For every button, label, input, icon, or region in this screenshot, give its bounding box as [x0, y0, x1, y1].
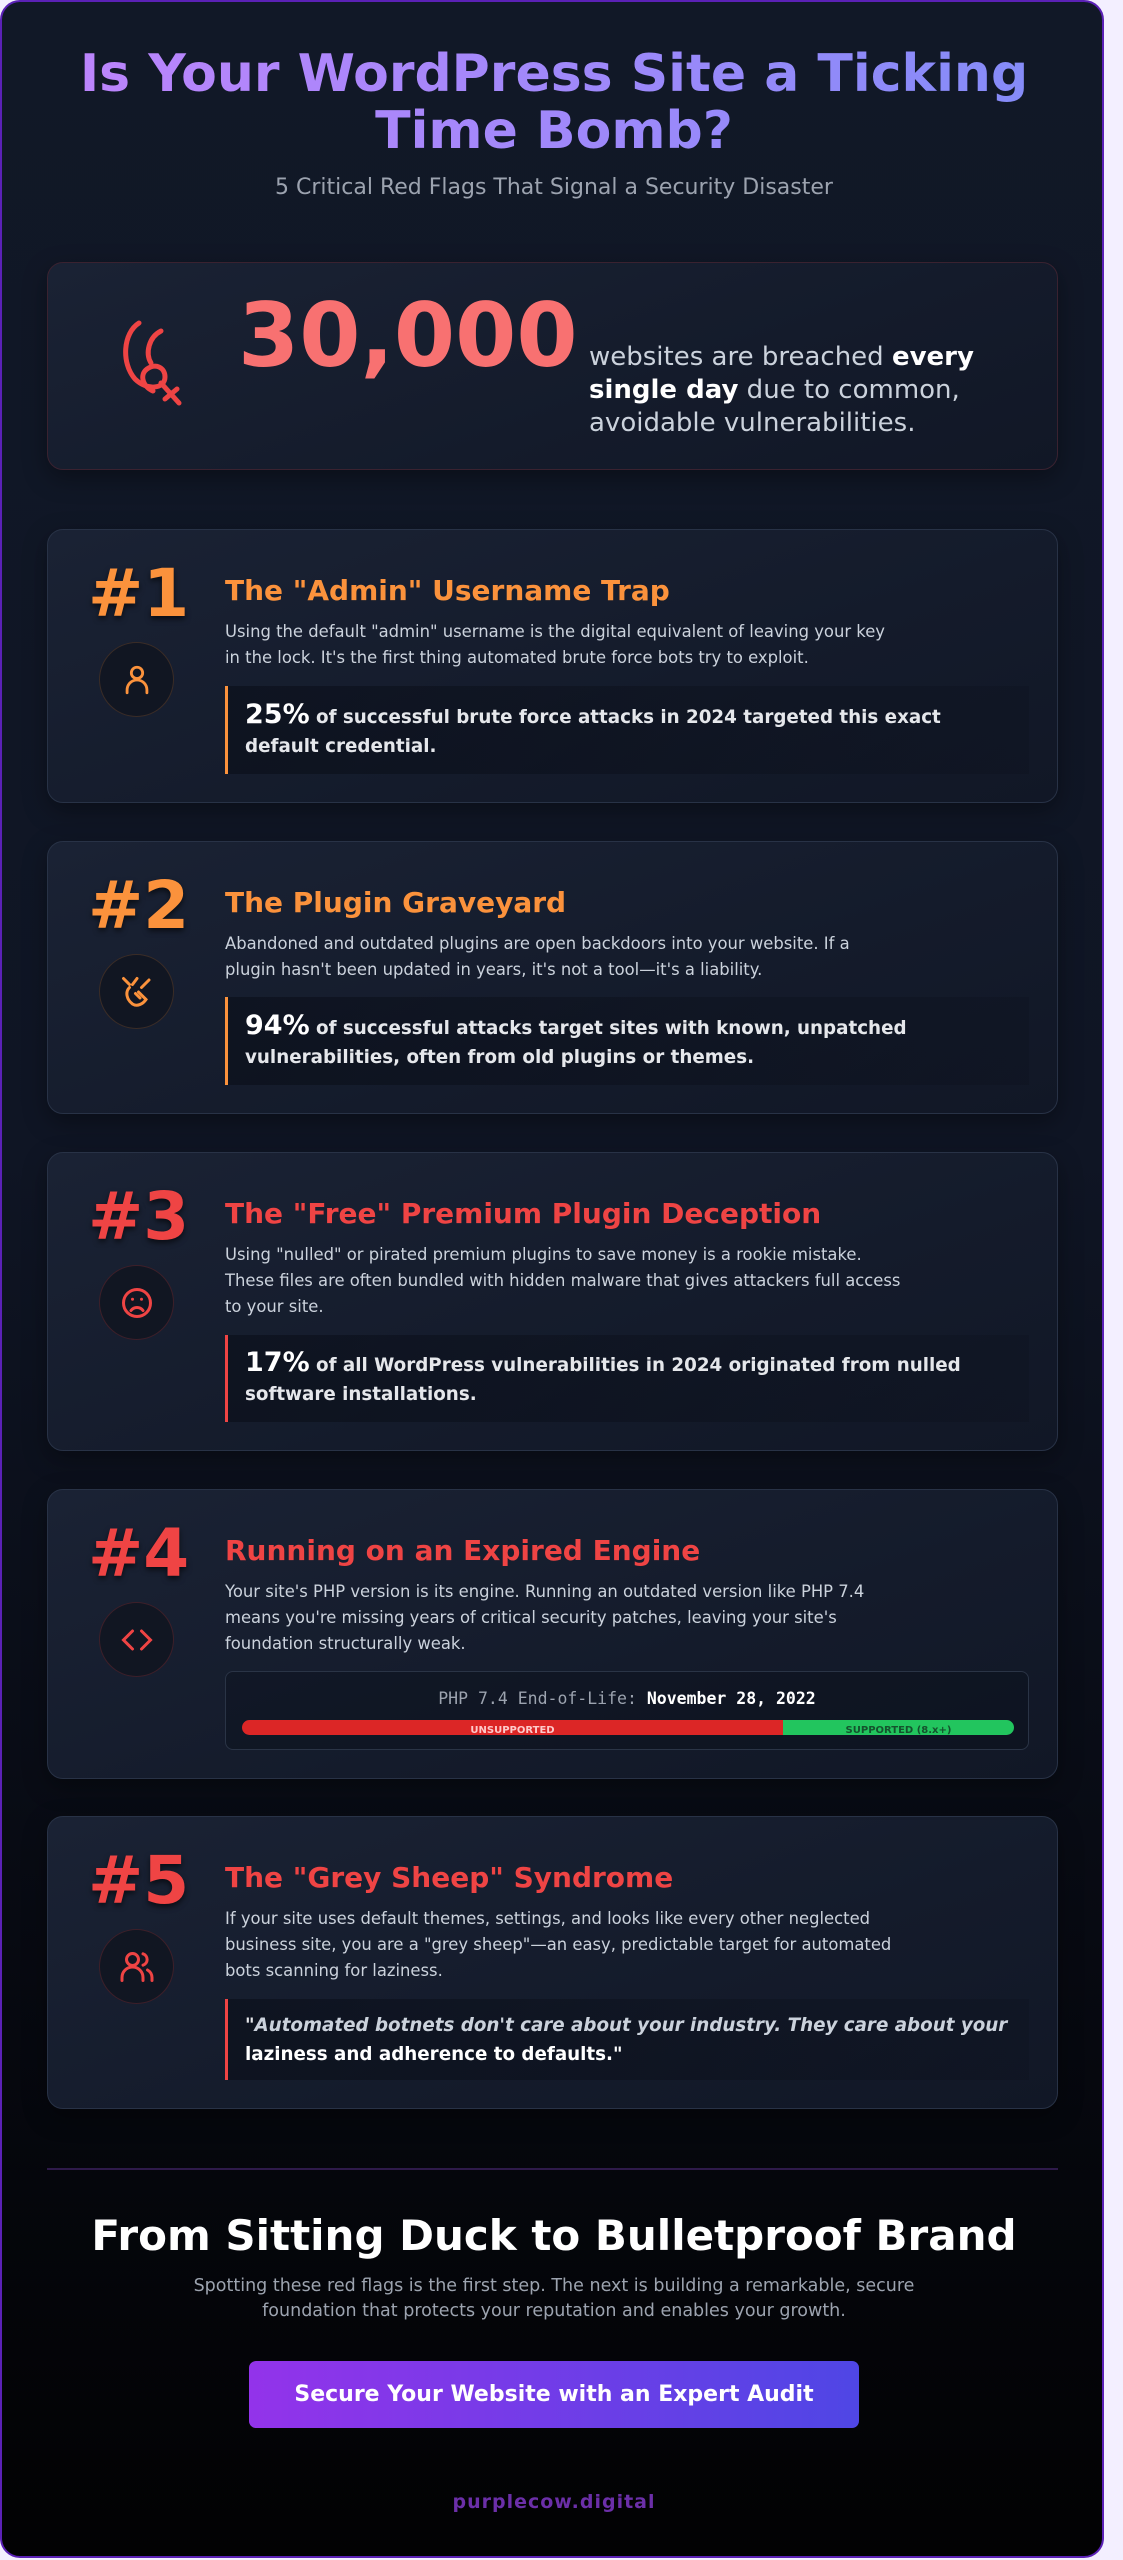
icon: user [99, 642, 174, 717]
callout 1: 25% of successful brute force attacks in 2024 targeted this exact [245, 698, 941, 730]
callout 2: vulnerabilities, often from old plugins or themes. [245, 1046, 754, 1068]
text 1: in the lock. It's the first thing automated brute force bots try to exploit. [225, 648, 809, 667]
quote callout [225, 1999, 1029, 2080]
title [2, 46, 1106, 160]
number 2: #2 [88, 867, 189, 944]
support bar [242, 1720, 1014, 1735]
cta button [249, 2361, 859, 2428]
icon: code [99, 1602, 174, 1677]
text 3: to your site. [225, 1297, 324, 1316]
eol text: PHP 7.4 End-of-Life: November 28, 2022 [438, 1689, 816, 1708]
subtitle: 5 Critical Red Flags That Signal a Security Disaster [275, 175, 833, 200]
callout 3: software installations. [245, 1384, 477, 1405]
number 5: #5 [88, 1842, 189, 1919]
heading 5: The "Grey Sheep" Syndrome [225, 1861, 673, 1894]
panel: flag 1 [47, 529, 1058, 803]
panel: flag 3 [47, 1152, 1058, 1451]
text 5: business site, you are a "grey sheep"—an easy, predictable target for automated [225, 1935, 891, 1954]
text 1: Using the default "admin" username is the digital equivalent of leaving your key [225, 622, 885, 641]
cta button: Secure Your Website with an Expert Audit [294, 2382, 814, 2407]
text 2: Abandoned and outdated plugins are open backdoors into your website. If a [225, 934, 850, 953]
callout 3 [225, 1335, 1029, 1422]
text 2 [225, 934, 850, 979]
number 3: #3 [88, 1178, 189, 1255]
text 4: Your site's PHP version is its engine. Running an outdated version like PHP 7.4 [225, 1582, 864, 1601]
icon: frown [99, 1265, 174, 1340]
number 4: #4 [88, 1515, 189, 1592]
heading 4: Running on an Expired Engine [225, 1534, 700, 1567]
text 2: plugin hasn't been updated in years, it's not a tool—it's a liability. [225, 960, 762, 979]
stat text [589, 342, 974, 438]
text 4: foundation structurally weak. [225, 1634, 466, 1653]
text 5: bots scanning for laziness. [225, 1961, 443, 1980]
callout 2: 94% of successful attacks target sites with known, unpatched [245, 1010, 907, 1040]
icon: users [99, 1929, 174, 2004]
footer text [194, 2276, 914, 2321]
text 3 [224, 1245, 900, 1316]
text 5 [225, 1909, 891, 1980]
panel: flag 4 [47, 1489, 1058, 1779]
callout 3: 17% of all WordPress vulnerabilities in 2024 originated from nulled [245, 1347, 961, 1378]
quote callout: "Automated botnets don't care about your industry. They care about your [245, 2014, 1007, 2036]
callout 2 [225, 997, 1029, 1085]
footer text: Spotting these red flags is the first step. The next is building a remarkable, secure [194, 2276, 914, 2296]
text 4 [225, 1582, 864, 1653]
footer heading: From Sitting Duck to Bulletproof Brand [91, 2211, 1017, 2260]
stat text: websites are breached every [589, 342, 974, 372]
stat number: 30,000 [238, 284, 578, 387]
panel: flag 5 [47, 1816, 1058, 2109]
heading 2: The Plugin Graveyard [225, 886, 566, 919]
text 5: If your site uses default themes, settings, and looks like every other neglected [225, 1909, 870, 1928]
panel: flag 2 [47, 841, 1058, 1114]
text 3: These files are often bundled with hidden malware that gives attackers full access [225, 1271, 900, 1290]
timeline box [225, 1671, 1029, 1750]
heading 3: The "Free" Premium Plugin Deception [225, 1197, 821, 1230]
callout 1: default credential. [245, 736, 436, 756]
icon: hook [123, 320, 182, 406]
heading 1: The "Admin" Username Trap [225, 574, 670, 607]
text 3: Using "nulled" or pirated premium plugins to save money is a rookie mistake. [225, 1245, 862, 1264]
panel: stat card [47, 262, 1058, 470]
icon: plug [99, 954, 174, 1029]
text 1 [225, 622, 885, 667]
number 1: #1 [88, 555, 189, 632]
callout 1 [225, 686, 1029, 774]
stat text: avoidable vulnerabilities. [589, 408, 915, 438]
text 4: means you're missing years of critical security patches, leaving your site's [225, 1608, 837, 1627]
footer text: foundation that protects your reputation and enables your growth. [262, 2301, 846, 2321]
quote callout: laziness and adherence to defaults." [245, 2044, 623, 2064]
brand: purplecow.digital [452, 2491, 656, 2513]
stat text: single day due to common, [589, 375, 960, 405]
title: Is Your WordPress Site a Ticking [80, 44, 1028, 104]
title: Time Bomb? [375, 101, 733, 161]
